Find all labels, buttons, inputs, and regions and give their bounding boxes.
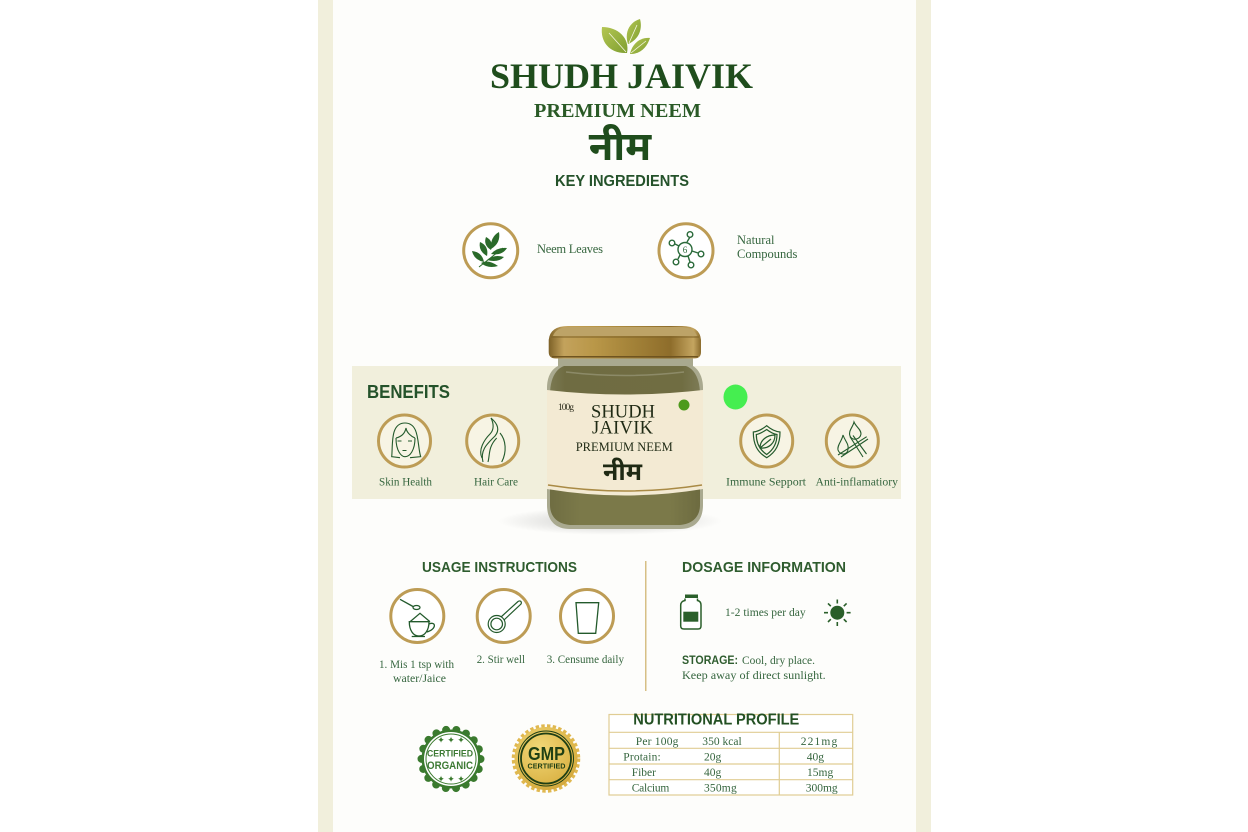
- right side strip: [916, 0, 931, 832]
- heading: USAGE INSTRUCTIONS: [422, 559, 577, 576]
- table rows: Fiber: [632, 767, 656, 779]
- badge: gmp certified: [514, 726, 578, 791]
- benefit: skin health: [378, 415, 432, 488]
- storage text: [682, 653, 826, 682]
- storage text: STORAGE:: [682, 653, 738, 667]
- label weight: 100g: [558, 403, 574, 413]
- logo: leaves: [602, 19, 650, 54]
- step 1 text: 1. Mis 1 tsp with: [379, 657, 454, 671]
- table rows: 300mg: [806, 783, 838, 795]
- step 3 icon: [560, 590, 614, 642]
- badge: certified organic: CERTIFIED: [427, 749, 473, 760]
- table rows: 20g: [704, 752, 722, 764]
- jar glass: [547, 356, 703, 529]
- icon: shield: [753, 426, 780, 458]
- step 2 text: 2. Stir well: [477, 652, 526, 666]
- label: Natural: [737, 233, 775, 247]
- table rows: 350 kcal: [702, 736, 742, 748]
- lower powder: [550, 485, 700, 525]
- table rows: Protain:: [623, 752, 661, 764]
- gold lid: [549, 326, 701, 358]
- icon: neem sprig: [472, 232, 507, 267]
- table rows: 15mg: [807, 767, 833, 779]
- heading: benefits: BENEFITS: [367, 382, 450, 402]
- heading: key ingredients: KEY INGREDIENTS: [555, 173, 689, 190]
- product jar: [498, 326, 722, 535]
- table heading: NUTRITIONAL PROFILE: [633, 712, 800, 728]
- benefit: hair care: [467, 415, 519, 488]
- benefit: immune support: [726, 415, 807, 488]
- icon: face: [392, 423, 421, 458]
- table rows: [623, 736, 838, 795]
- step 1 text: water/Jaice: [393, 671, 446, 685]
- table rows: 221mg: [801, 736, 838, 748]
- benefit: anti-inflammatory: [816, 415, 898, 488]
- storage text: Cool, dry place.: [742, 653, 815, 667]
- badge: certified organic: ✦ ✦ ✦: [437, 735, 465, 745]
- label brand: JAIVIK: [592, 418, 654, 438]
- table: nutritional profile: [609, 712, 853, 795]
- section: dosage information: [681, 559, 851, 682]
- panel: benefits band: [352, 366, 901, 499]
- table rows: 40g: [807, 752, 824, 764]
- label brand: SHUDH: [591, 402, 655, 422]
- upper powder: [550, 366, 700, 395]
- table rows: 350mg: [704, 783, 737, 795]
- badge: gmp certified: CERTIFIED: [528, 762, 566, 770]
- label: Immune Sepport: [726, 474, 807, 488]
- table rows: 40g: [704, 767, 722, 779]
- icon: bottle: [681, 594, 701, 629]
- icon: hair flame: [481, 418, 505, 462]
- icon: sun: [824, 600, 851, 626]
- label: Anti-inflamatiory: [816, 474, 898, 488]
- dose text: 1-2 times per day: [725, 605, 806, 619]
- icon: crossed flames: [838, 422, 868, 457]
- badge: certified organic: [422, 730, 480, 788]
- label: Compounds: [737, 247, 798, 261]
- badge: certified organic: ORGANIC: [427, 760, 473, 772]
- label hindi: नीम: [603, 457, 643, 486]
- label: Skin Health: [379, 474, 432, 488]
- ingredient: natural compounds: [659, 224, 798, 278]
- heading: DOSAGE INFORMATION: [682, 559, 846, 576]
- label: Neem Leaves: [537, 242, 603, 256]
- label: Hair Care: [474, 474, 518, 488]
- badge: certified organic: ✦ ✦ ✦: [437, 774, 465, 784]
- icon: molecule: 6: [683, 245, 688, 255]
- label product: PREMIUM NEEM: [576, 440, 673, 454]
- subtitle: PREMIUM NEEM: [534, 100, 701, 122]
- ingredient: neem leaves: [464, 224, 603, 278]
- section: usage instructions: [379, 559, 624, 685]
- storage text: Keep away of direct sunlight.: [682, 668, 826, 682]
- table rows: Calcium: [632, 783, 669, 795]
- title: SHUDH JAIVIK: [490, 56, 753, 96]
- green dot: [724, 384, 748, 410]
- step 1 icon: [391, 590, 444, 642]
- jar label: [547, 390, 703, 496]
- badge: gmp certified: GMP: [528, 744, 565, 764]
- page background: [333, 0, 916, 832]
- divider: [645, 561, 646, 691]
- left side strip: [318, 0, 333, 832]
- label dot: [678, 400, 690, 410]
- hindi name: नीम: [589, 124, 652, 169]
- step 2 icon: [477, 590, 530, 642]
- table rows: Per 100g: [636, 736, 679, 748]
- step 3 text: 3. Censume daily: [547, 652, 624, 666]
